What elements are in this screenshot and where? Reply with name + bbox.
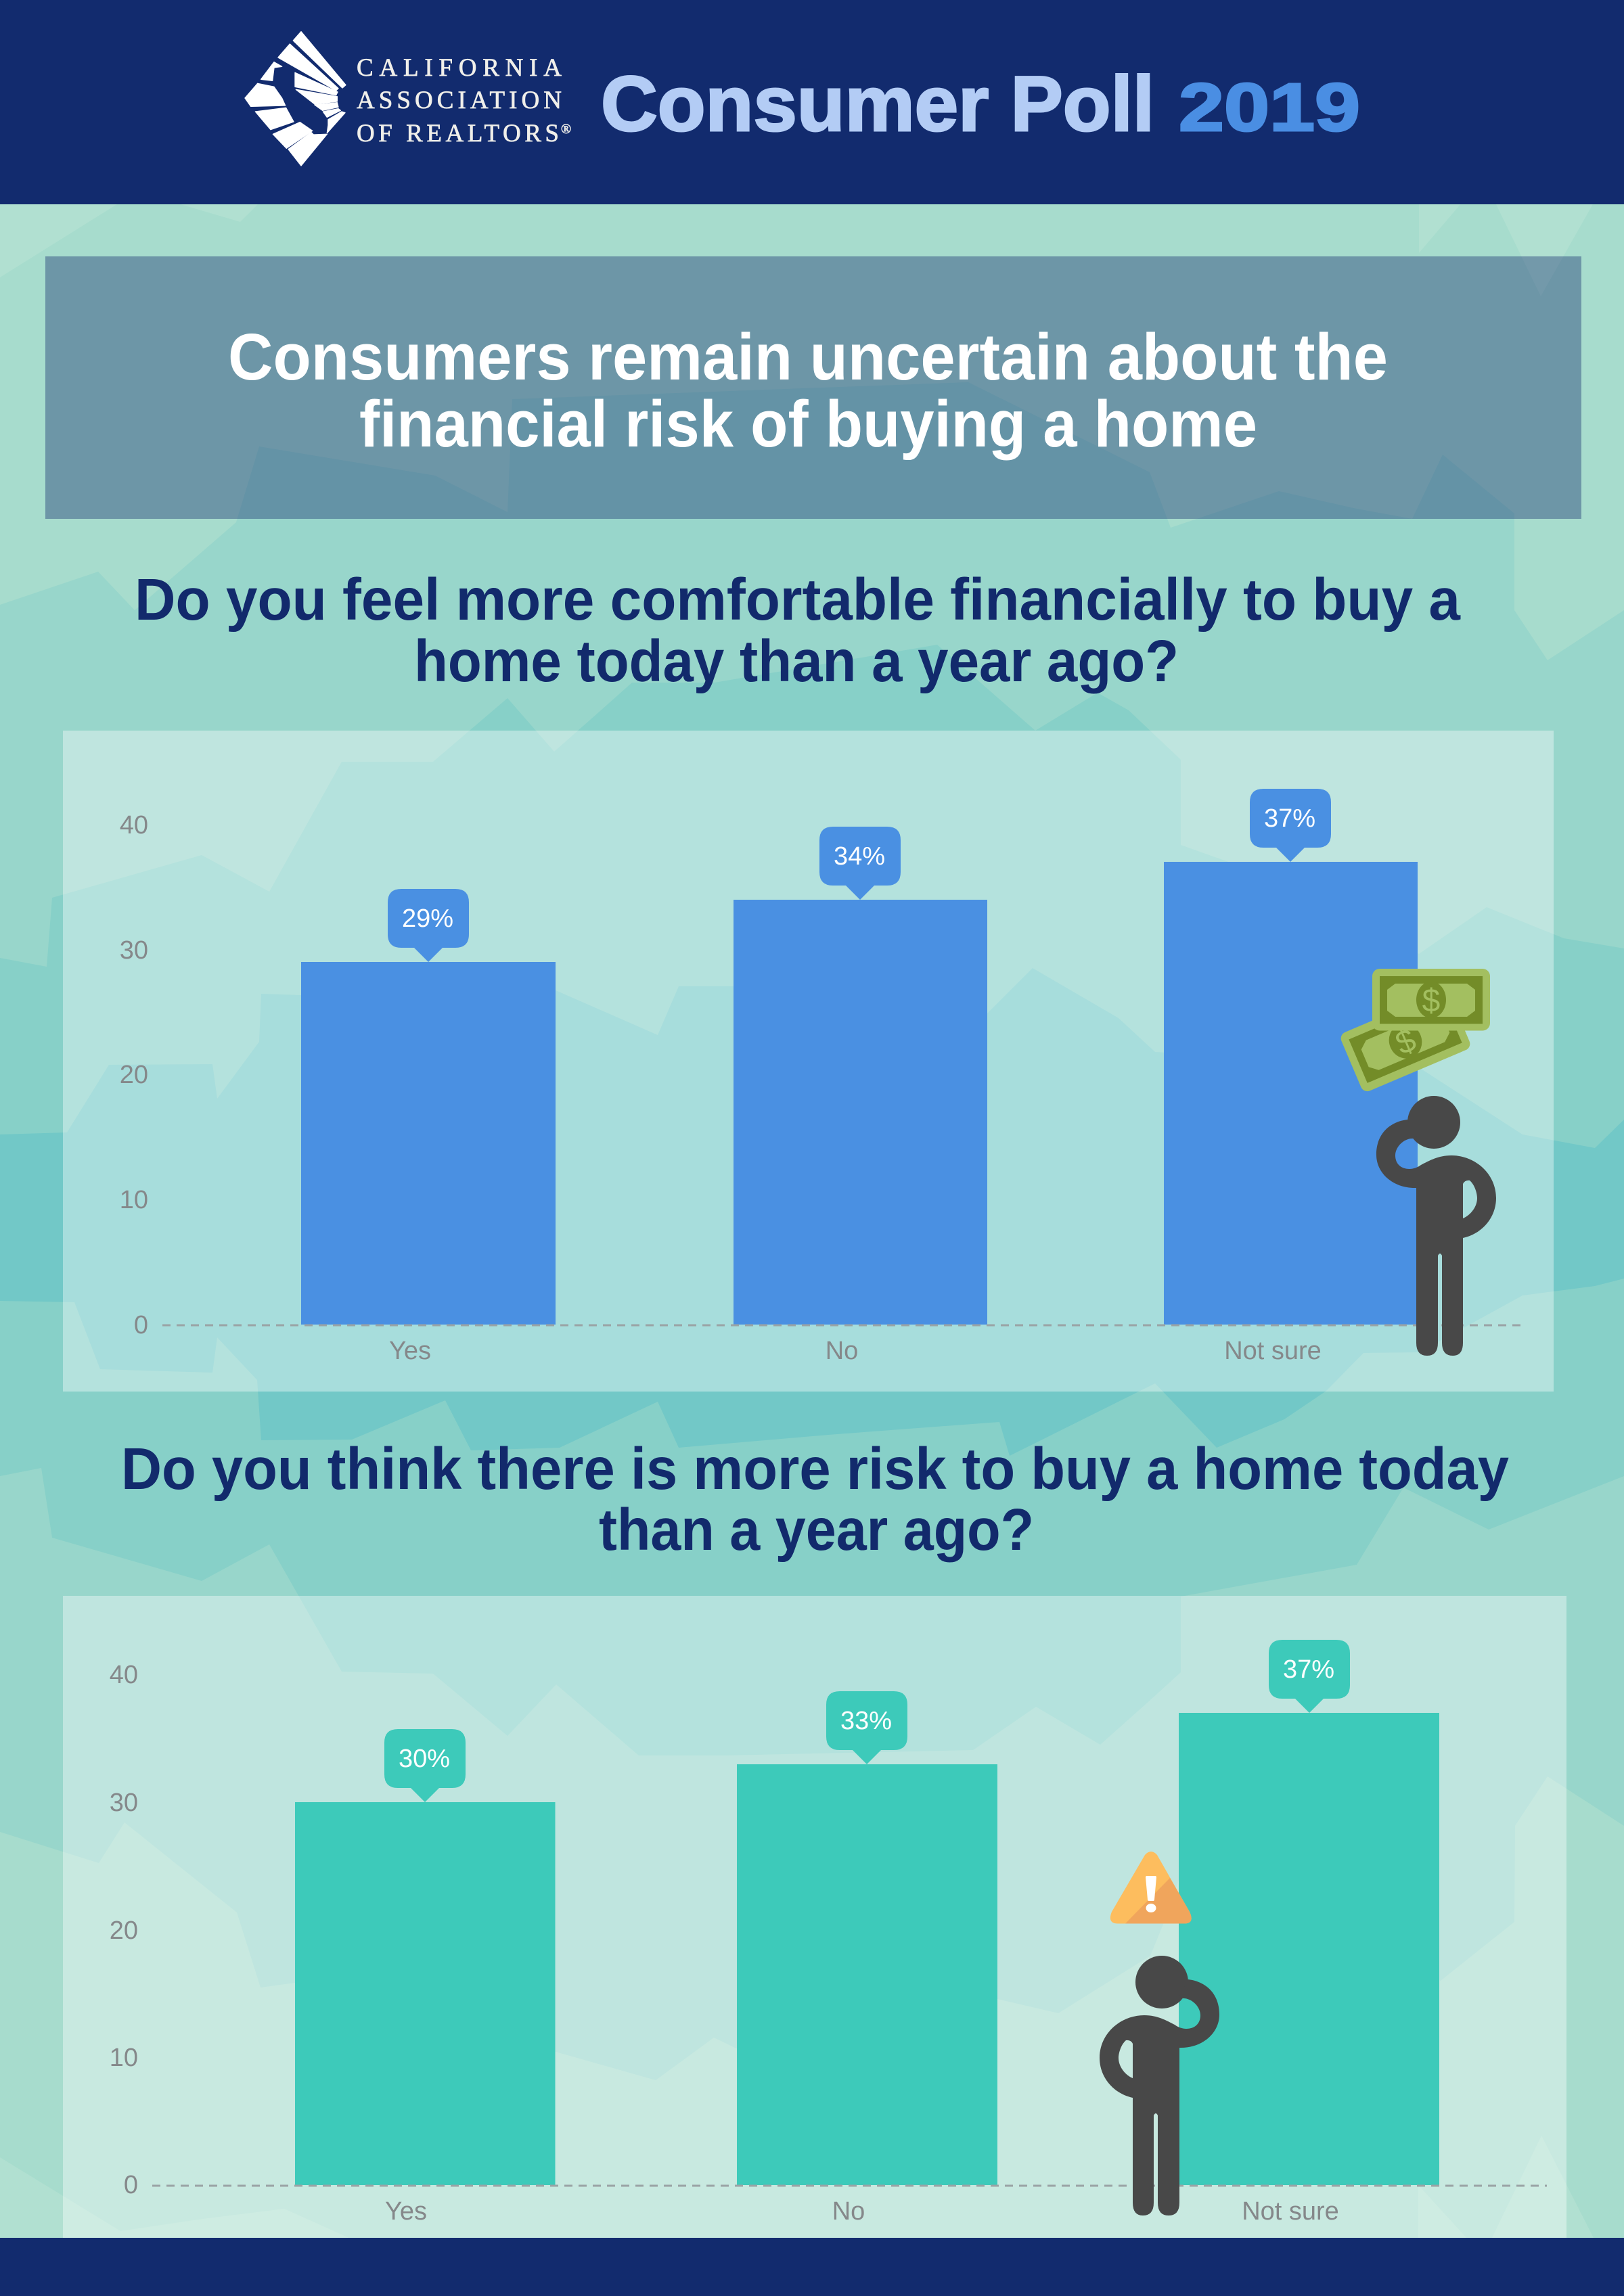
x axis labels chart 1: Not sure xyxy=(1224,1337,1322,1365)
x axis labels chart 1: No xyxy=(826,1337,858,1365)
value bubble 34%: 34% xyxy=(834,842,885,871)
logo: California Association of Realtors xyxy=(245,32,571,166)
y axis labels chart 2: 0 xyxy=(124,2171,138,2199)
heading: question 1 xyxy=(135,567,1461,694)
value bubble 33% xyxy=(826,1691,907,1764)
x axis labels chart 2 xyxy=(385,2197,1339,2226)
banner: main headline xyxy=(45,256,1581,519)
value bubble 37% xyxy=(1269,1640,1350,1713)
x axis labels chart 2: Yes xyxy=(385,2197,427,2226)
icon: warning triangle xyxy=(1110,1852,1192,1924)
y axis labels chart 1 xyxy=(120,811,148,1339)
x axis labels chart 2: Not sure xyxy=(1242,2197,1339,2226)
icon: thinking person 2 xyxy=(1100,1956,1219,2215)
header title: Consumer Poll 2019: Consumer Poll xyxy=(601,61,1154,147)
footer bar xyxy=(0,2238,1624,2296)
logo wordmark: CALIFORNIA xyxy=(357,54,562,82)
value bubble 37%: 37% xyxy=(1264,804,1315,833)
icon: money bills: $ xyxy=(1391,1022,1421,1062)
panel: chart 1 comfortable financially xyxy=(63,731,1554,1392)
value bubble 37%: 37% xyxy=(1283,1655,1334,1684)
x axis labels chart 1 xyxy=(389,1337,1322,1365)
heading: question 2 xyxy=(121,1436,1509,1563)
value bubble 30%: 30% xyxy=(399,1745,450,1773)
y axis labels chart 1: 0 xyxy=(134,1311,148,1339)
value bubble 33%: 33% xyxy=(840,1707,892,1735)
logo wordmark: OF REALTORS xyxy=(357,120,559,147)
y axis labels chart 1: 10 xyxy=(120,1186,148,1214)
banner: main headline: financial risk of buying a home xyxy=(359,387,1257,461)
bars chart 1 xyxy=(301,862,1418,1325)
y axis labels chart 2 xyxy=(110,1661,138,2199)
heading: question 1: home today than a year ago? xyxy=(414,628,1179,694)
value bubble 29%: 29% xyxy=(402,904,453,933)
y axis labels chart 2: 30 xyxy=(110,1789,138,1817)
y axis labels chart 2: 10 xyxy=(110,2044,138,2072)
logo wordmark: ® xyxy=(561,122,571,137)
heading: question 1: Do you feel more comfortable financially to buy a xyxy=(135,567,1461,633)
logo wordmark: ASSOCIATION xyxy=(357,87,562,114)
banner: main headline: Consumers remain uncertain about the xyxy=(228,320,1388,394)
x axis labels chart 1: Yes xyxy=(389,1337,431,1365)
bars chart 2 xyxy=(295,1713,1439,2185)
y axis labels chart 1: 40 xyxy=(120,811,148,840)
y axis labels chart 1: 30 xyxy=(120,936,148,965)
icon: money bills: $ xyxy=(1422,983,1440,1019)
icon: money bills xyxy=(1339,969,1490,1093)
x axis labels chart 2: No xyxy=(832,2197,865,2226)
y axis labels chart 2: 40 xyxy=(110,1661,138,1689)
value bubble 34% xyxy=(819,827,901,900)
value bubble 29% xyxy=(388,889,469,962)
y axis labels chart 1: 20 xyxy=(120,1061,148,1089)
logo wordmark xyxy=(357,54,571,147)
icon: thinking person 1 xyxy=(1376,1096,1496,1356)
value bubble 30% xyxy=(384,1729,466,1802)
header title: Consumer Poll 2019: 2019 xyxy=(1179,70,1360,145)
heading: question 2: Do you think there is more risk to buy a home today xyxy=(121,1436,1509,1502)
panel: chart 2 more risk xyxy=(63,1596,1566,2238)
y axis labels chart 2: 20 xyxy=(110,1916,138,1945)
icon: logo diamond xyxy=(245,32,346,166)
header bar xyxy=(0,0,1624,204)
heading: question 2: than a year ago? xyxy=(599,1497,1034,1563)
value bubble 37% xyxy=(1250,789,1331,862)
